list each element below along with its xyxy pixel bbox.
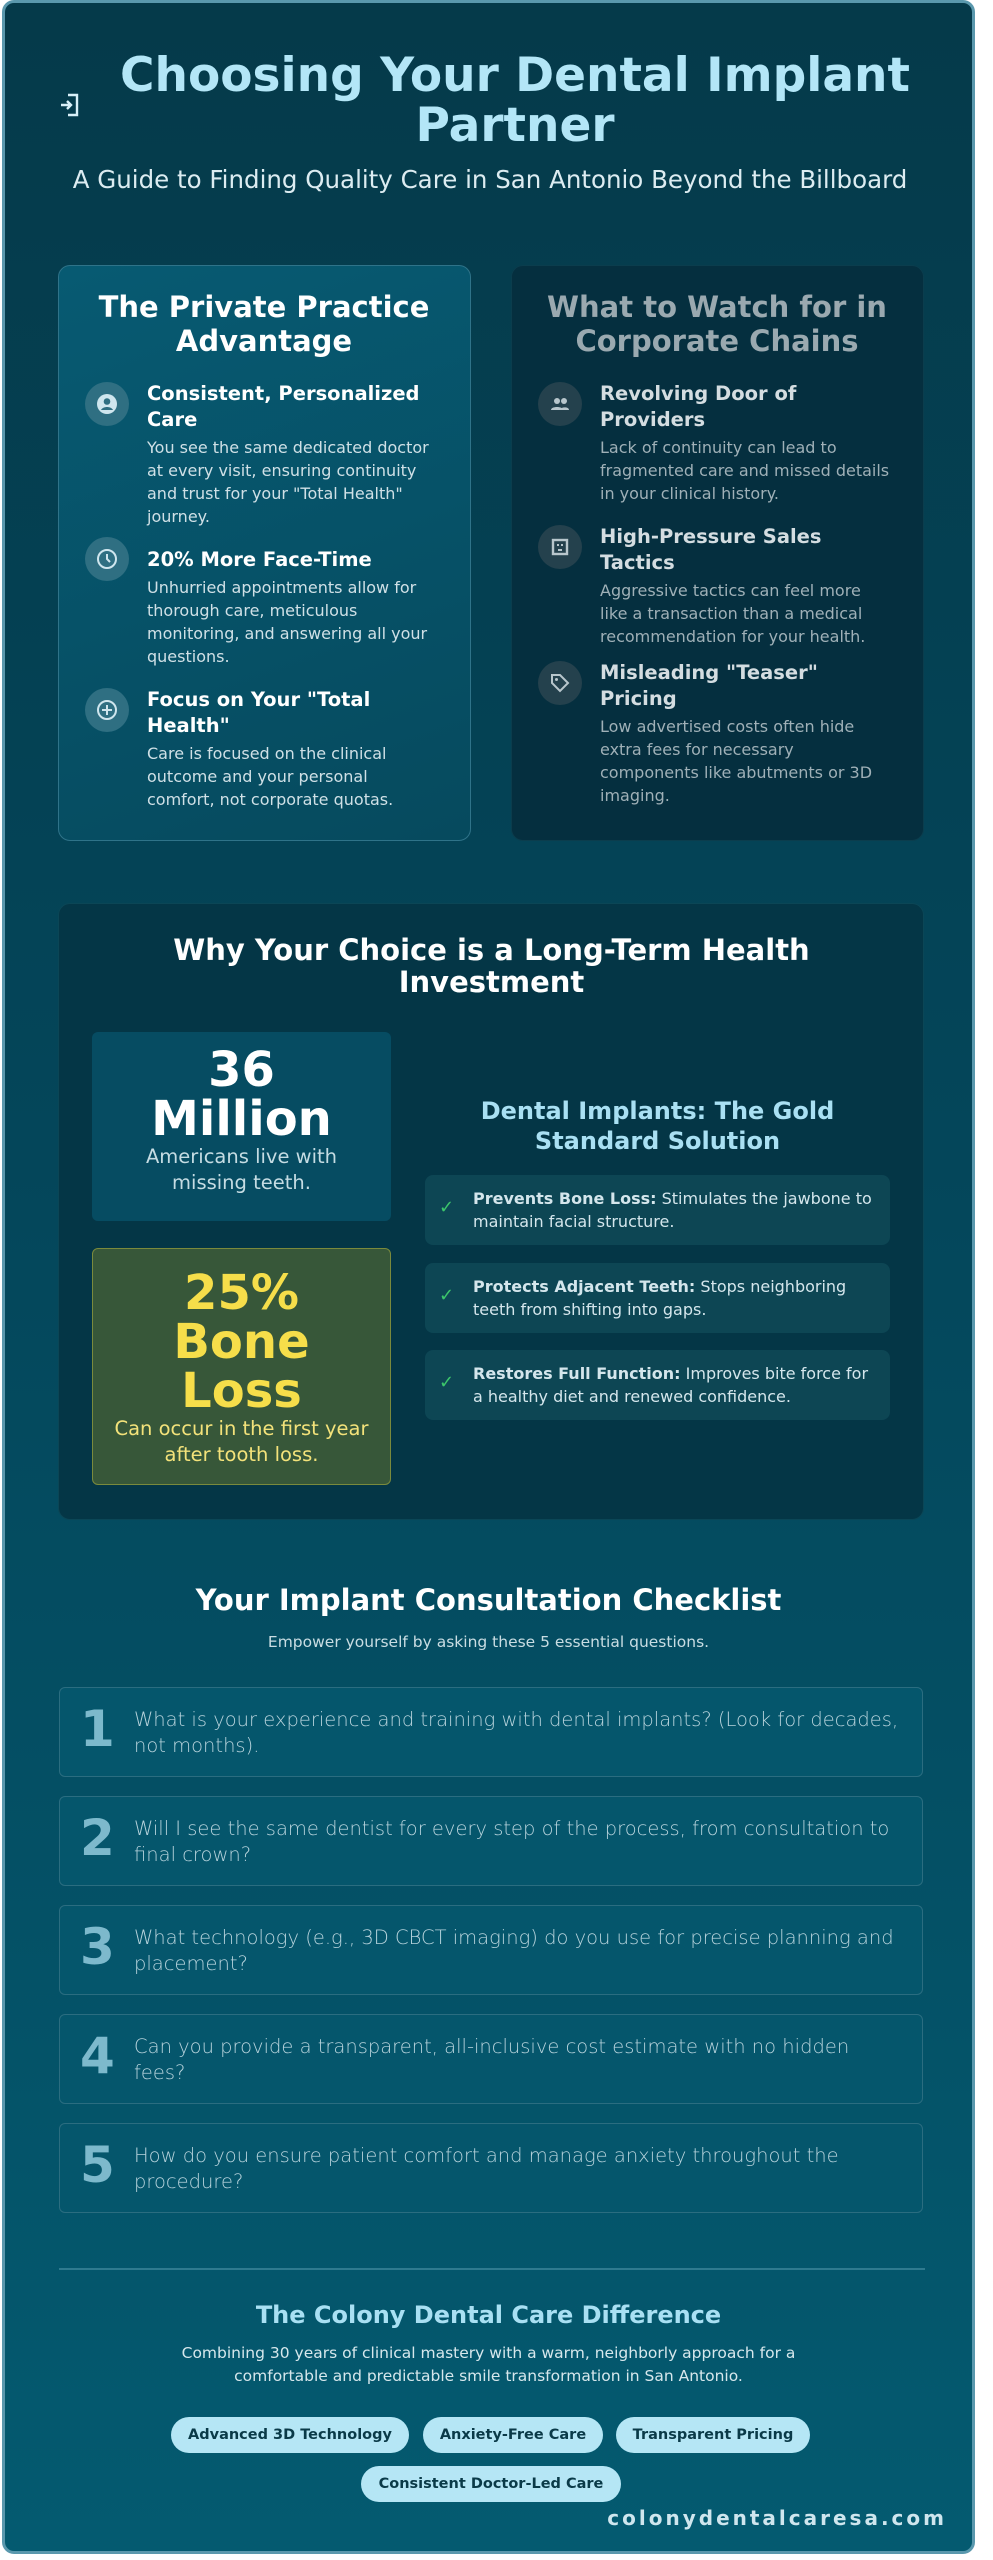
heading: checklist: Your Implant Consultation Checklist (196, 1583, 781, 1617)
panel: private practice advantage: You see the same dedicated doctor at every visit, ensuring continuity and trust for your "Total Health" journey. (147, 438, 429, 526)
heading: Why Your Choice is a Long-Term Health (173, 933, 810, 967)
item: revolving door (538, 382, 889, 503)
pill: doctor-led: Consistent Doctor-Led Care (379, 2476, 603, 2492)
pill: 3D technology: Advanced 3D Technology (188, 2427, 392, 2443)
panel: corporate chains: Revolving Door of (600, 382, 796, 405)
heading (173, 933, 810, 999)
panel: corporate chains: Pricing (600, 687, 677, 710)
stat: 36 million: Million (151, 1091, 332, 1147)
heading: The Private Practice (99, 290, 429, 324)
stat: 25% bone loss: after tooth loss. (165, 1443, 318, 1466)
pill: doctor-led (361, 2466, 621, 2502)
benefit: full function: Restores Full Function: Improves bite force for a healthy diet and renewed confidence. (473, 1364, 868, 1406)
checklist subtitle: Empower yourself by asking these 5 essential questions. (268, 1633, 709, 1651)
panel: corporate chains (511, 265, 924, 841)
stat: 36 million: missing teeth. (172, 1171, 311, 1194)
stat: 25% bone loss: 25% (184, 1265, 299, 1321)
panel: corporate chains: Aggressive tactics can feel more like a transaction than a medical recommendation for your health. (600, 581, 865, 646)
title: Choosing Your Dental Implant (120, 48, 910, 103)
panel: private practice advantage: Unhurried appointments allow for thorough care, meticulous monitoring, and answering all your questions. (147, 578, 427, 666)
benefit: bone loss: Prevents Bone Loss: Stimulates the jawbone to maintain facial structure. (473, 1189, 872, 1231)
panel: corporate chains: Lack of continuity can lead to fragmented care and missed details in your clinical history. (600, 438, 889, 503)
question 5: How do you ensure patient comfort and manage anxiety throughout the procedure? (134, 2144, 839, 2193)
heading: What to Watch for in (547, 290, 887, 324)
pill: anxiety-free: Anxiety-Free Care (440, 2427, 586, 2443)
question 5: 5 (80, 2136, 115, 2194)
panel: private practice advantage (58, 265, 471, 841)
stat: 25% bone loss: Bone (173, 1314, 310, 1370)
question 3 (59, 1905, 923, 1995)
benefit: bone loss (425, 1175, 890, 1245)
panel: private practice advantage: Consistent, Personalized (147, 382, 420, 405)
question 1: What is your experience and training with dental implants? (Look for decades, not months). (134, 1708, 898, 1757)
question 1: 1 (80, 1700, 115, 1758)
question 3: What technology (e.g., 3D CBCT imaging) do you use for precise planning and placement? (134, 1926, 894, 1975)
panel: private practice advantage: Health" (147, 714, 230, 737)
heading (98, 290, 429, 358)
question 4: 4 (80, 2027, 115, 2085)
panel: private practice advantage: Care is focused on the clinical outcome and your personal comfort, not corporate quotas. (147, 744, 393, 809)
title: Partner (415, 98, 615, 153)
heading: gold standard (481, 1097, 834, 1155)
question 1 (59, 1687, 923, 1777)
item: sales tactics (538, 525, 865, 646)
panel: corporate chains: Low advertised costs often hide extra fees for necessary components like abutments or 3D imaging. (600, 717, 872, 805)
panel: corporate chains: Providers (600, 408, 705, 431)
panel: private practice advantage: Focus on Your "Total (147, 688, 370, 711)
panel: corporate chains: Tactics (600, 551, 675, 574)
benefit: adjacent teeth: ✓ (439, 1285, 454, 1306)
question 2: Will I see the same dentist for every step of the process, from consultation to final crown? (134, 1817, 889, 1866)
icon: implant (61, 94, 78, 116)
panel: private practice advantage: 20% More Face-Time (147, 548, 372, 571)
question 3: 3 (80, 1918, 115, 1976)
subtitle: A Guide to Finding Quality Care in San Antonio Beyond the Billboard (73, 165, 907, 194)
question 2 (59, 1796, 923, 1886)
panel: private practice advantage: Care (147, 408, 197, 431)
item: consistent care (85, 382, 429, 526)
benefit: full function: ✓ (439, 1372, 454, 1393)
stat: 25% bone loss (92, 1248, 391, 1485)
heading: Advantage (176, 324, 352, 358)
panel: corporate chains: Misleading "Teaser" (600, 661, 818, 684)
pill: pricing: Transparent Pricing (633, 2427, 793, 2443)
panel: long-term health investment (58, 903, 924, 1520)
item: teaser pricing (538, 661, 872, 805)
stat: 36 million: Americans live with (146, 1145, 337, 1168)
item: face-time (85, 537, 428, 666)
heading (547, 290, 887, 358)
heading: gold standard: Standard Solution (535, 1127, 780, 1155)
footer url: colonydentalcaresa.com (607, 2506, 947, 2530)
question 5 (59, 2123, 923, 2213)
heading: gold standard: Dental Implants: The Gold (481, 1097, 834, 1125)
benefit: adjacent teeth (425, 1263, 890, 1333)
pill: anxiety-free (423, 2417, 603, 2453)
benefit: full function (425, 1350, 890, 1420)
heading: Corporate Chains (575, 324, 859, 358)
stat: 36 million (92, 1032, 391, 1221)
question 2: 2 (80, 1809, 115, 1867)
pill: pricing (616, 2417, 810, 2453)
stat: 25% bone loss: Loss (181, 1363, 302, 1419)
benefit: bone loss: ✓ (439, 1197, 454, 1218)
question 4: Can you provide a transparent, all-inclusive cost estimate with no hidden (134, 2035, 849, 2058)
pill: 3D technology (171, 2417, 409, 2453)
question 4: fees? (134, 2061, 185, 2084)
question 4 (59, 2014, 923, 2104)
heading: colony difference: The Colony Dental Care Difference (256, 2301, 721, 2329)
stat: 36 million: 36 (208, 1042, 275, 1098)
benefit: adjacent teeth: Protects Adjacent Teeth: Stops neighboring teeth from shifting into gaps. (473, 1277, 846, 1319)
difference paragraph: Combining 30 years of clinical mastery with a warm, neighborly approach for a comfortable and predictable smile transformation in San Antonio. (182, 2344, 795, 2385)
panel: corporate chains: High-Pressure Sales (600, 525, 822, 548)
pills (171, 2417, 810, 2502)
heading: Investment (399, 965, 584, 999)
item: total health (85, 688, 393, 809)
title (120, 48, 910, 153)
stat: 25% bone loss: Can occur in the first year (114, 1417, 369, 1440)
